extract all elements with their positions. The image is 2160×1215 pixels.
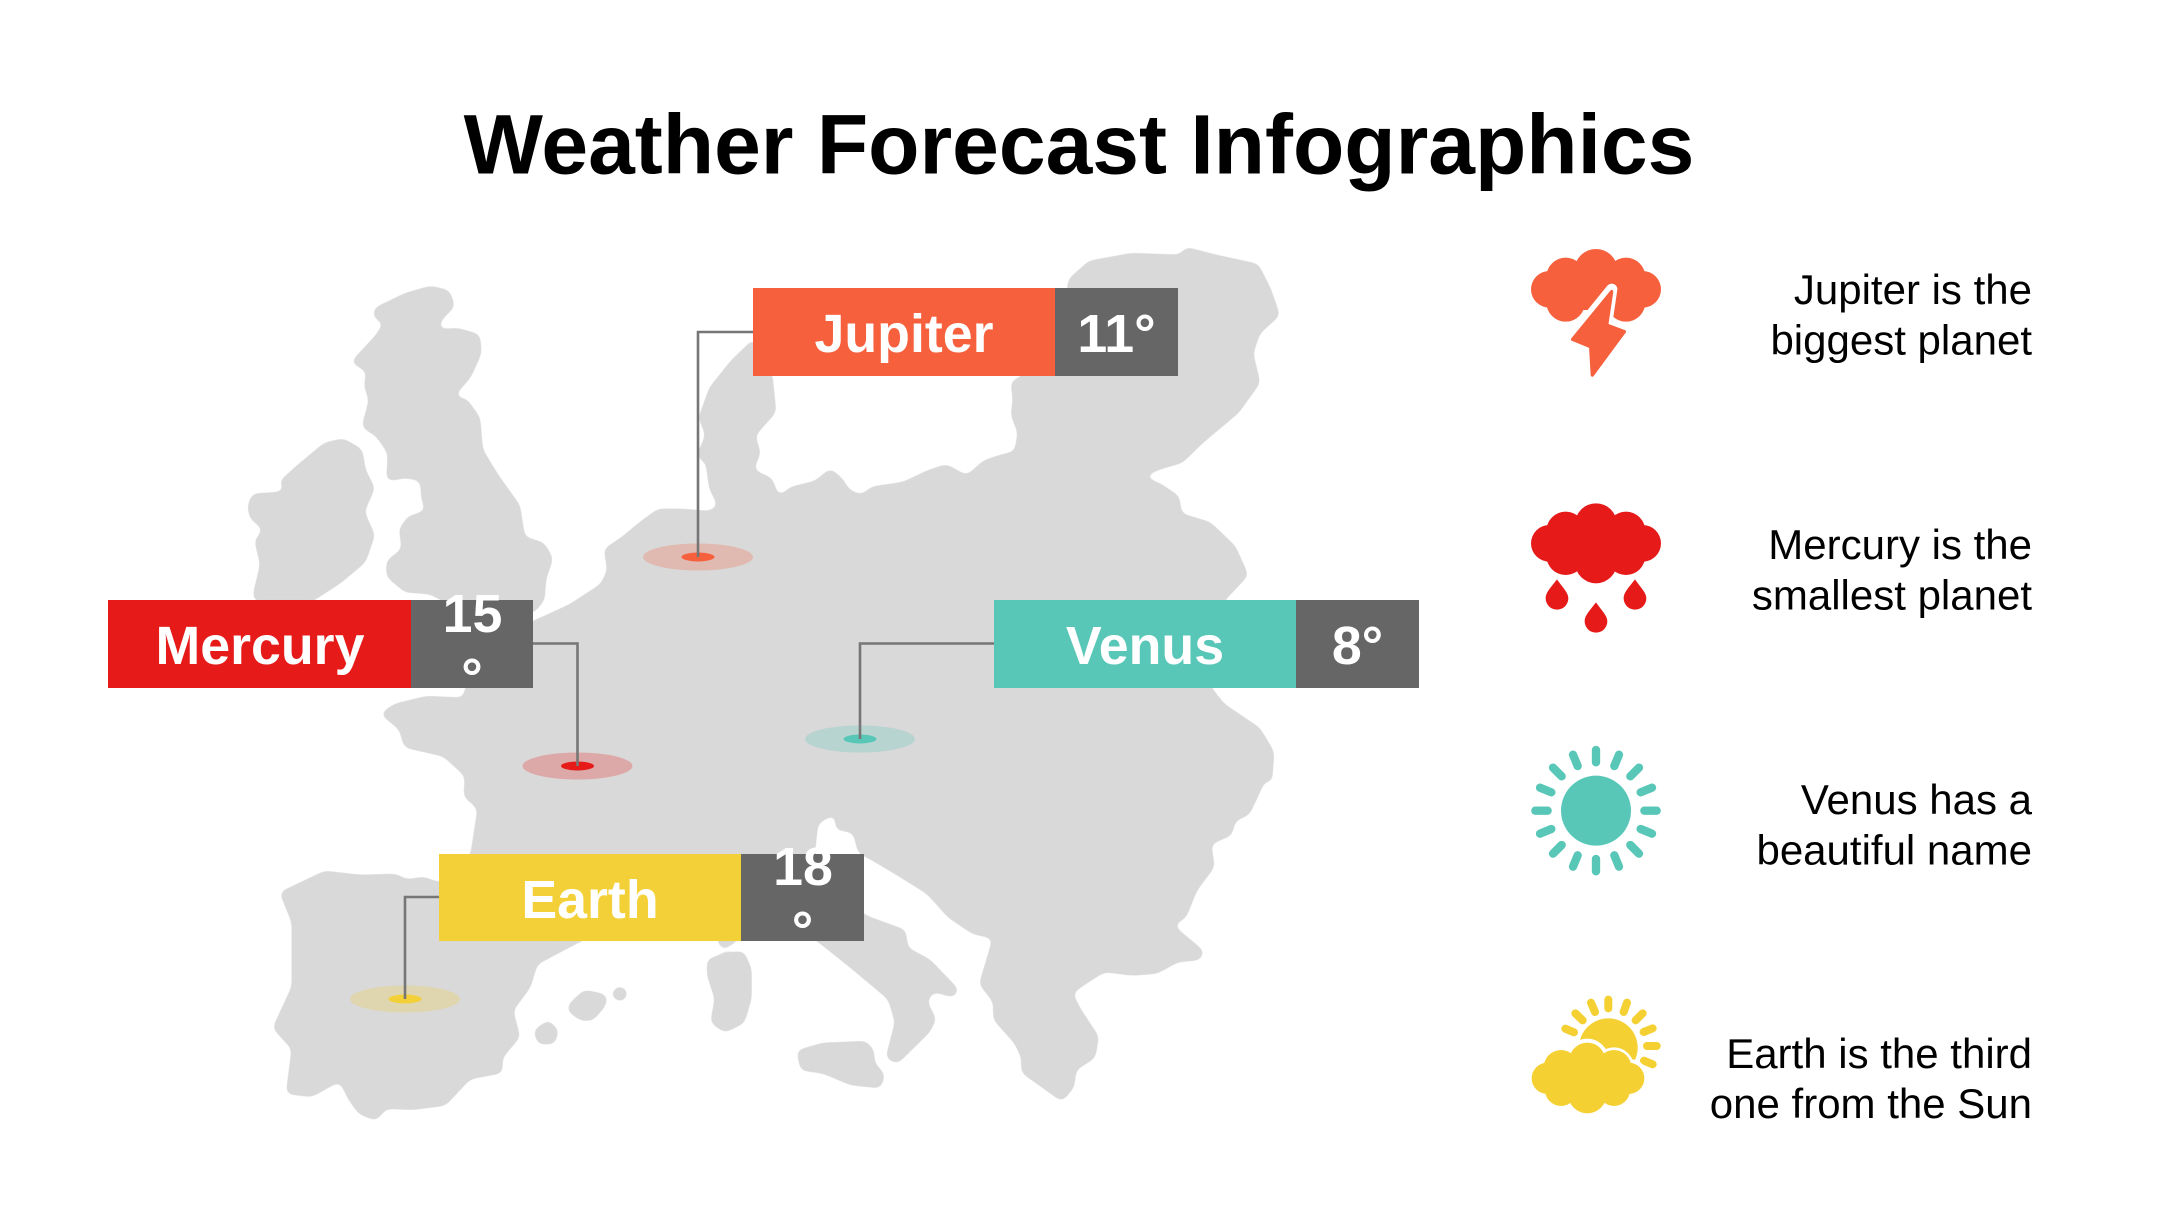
text: Jupiter description: Jupiter is the xyxy=(1794,266,2032,313)
map: Balearic islands xyxy=(536,988,625,1043)
map: Sicily xyxy=(799,1043,883,1087)
icon: thunderstorm cloud xyxy=(1531,249,1661,377)
text: Venus description: beautiful name xyxy=(1756,826,2032,874)
label: Jupiter: Jupiter xyxy=(814,304,994,364)
icon: sun behind cloud xyxy=(1532,1000,1657,1113)
marker: Mercury xyxy=(522,644,632,780)
marker: Venus xyxy=(805,644,994,752)
marker: Jupiter xyxy=(643,332,753,570)
map: Sardinia xyxy=(709,953,750,1031)
text: Jupiter description: biggest planet xyxy=(1770,316,2032,364)
map: mainland xyxy=(275,249,1278,1119)
label: Earth: Earth xyxy=(521,870,659,930)
text: Mercury description: Mercury is the xyxy=(1768,521,2032,568)
label: Venus xyxy=(994,600,1419,688)
map of Europe xyxy=(249,249,1278,1119)
label: Earth: ° xyxy=(792,901,813,961)
map: Great Britain xyxy=(353,287,551,611)
label: Jupiter: 11° xyxy=(1077,304,1156,364)
label: Earth: 18 xyxy=(773,837,833,897)
text: Venus description: Venus has a xyxy=(1801,776,2033,823)
label: Mercury: 15 xyxy=(443,584,502,644)
title: Weather Forecast Infographics xyxy=(464,98,1694,192)
text: Mercury description: smallest planet xyxy=(1752,572,2032,618)
label: Venus: Venus xyxy=(1066,616,1224,676)
text: Earth description: Earth is the third xyxy=(1726,1030,2032,1077)
marker: Earth xyxy=(350,897,460,1012)
map: Corsica xyxy=(718,934,736,947)
label: Mercury: ° xyxy=(461,648,483,708)
icon: rain cloud xyxy=(1531,503,1661,633)
label: Mercury: Mercury xyxy=(156,616,365,676)
text: Earth description: one from the Sun xyxy=(1710,1080,2032,1127)
label: Jupiter xyxy=(753,288,1178,376)
label: Mercury xyxy=(108,584,533,708)
label: Earth xyxy=(439,837,864,961)
icon: sun xyxy=(1535,750,1657,871)
label: Venus: 8° xyxy=(1332,616,1383,676)
map: Ireland xyxy=(249,440,373,600)
